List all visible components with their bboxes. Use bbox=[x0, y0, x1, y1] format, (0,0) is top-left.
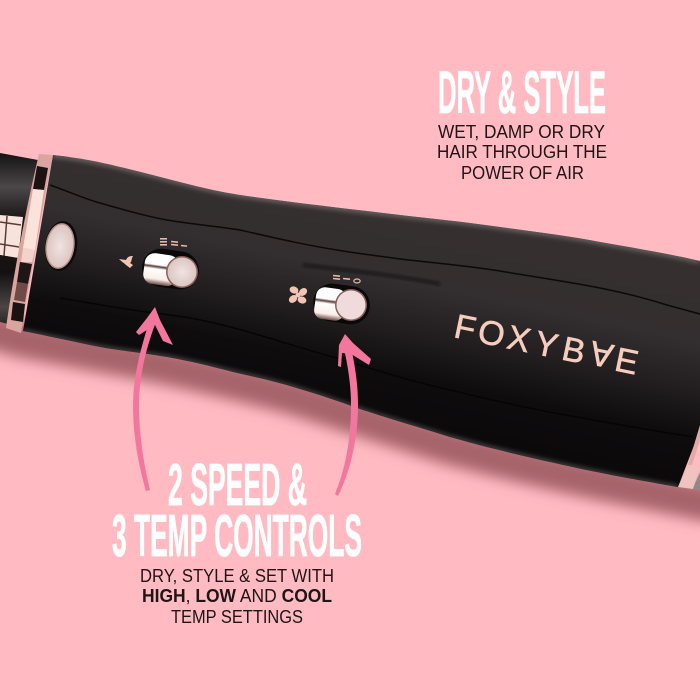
body rim light bbox=[23, 155, 700, 487]
infographic canvas bbox=[0, 70, 700, 623]
infographic canvas: 3 TEMP CONTROLS bbox=[112, 503, 362, 569]
round button bbox=[42, 219, 80, 273]
text: controls description: TEMP SETTINGS bbox=[171, 607, 303, 627]
temperature level marks bbox=[160, 238, 187, 247]
logo: FOXYBAE: E bbox=[612, 341, 642, 383]
right collar bbox=[688, 425, 700, 465]
logo: FOXYBAE: A bbox=[586, 333, 617, 375]
text: dry and style description: HAIR THROUGH THE bbox=[437, 142, 607, 162]
speed level marks bbox=[333, 275, 360, 283]
logo: FOXYBAE: FOXYB bbox=[451, 308, 589, 372]
logo: FOXYBAE bbox=[451, 305, 642, 383]
body seams bbox=[50, 185, 700, 314]
heading: speed and temp controls bbox=[112, 452, 362, 569]
text: dry and style description: POWER OF AIR bbox=[461, 163, 584, 183]
icon: heat bbox=[119, 256, 133, 268]
text: dry and style description: WET, DAMP OR DRY bbox=[438, 122, 605, 142]
handle body bbox=[23, 155, 700, 487]
arrow: right control bbox=[335, 334, 371, 496]
text: dry and style description bbox=[437, 122, 607, 183]
chrome insert bbox=[0, 215, 23, 258]
left barrel bbox=[0, 153, 38, 324]
text: controls description: DRY, STYLE & SET WITH bbox=[140, 566, 334, 586]
speed slider bbox=[311, 281, 372, 327]
shadow under styler bbox=[0, 328, 700, 506]
icon: fan bbox=[287, 285, 309, 305]
text: controls description bbox=[140, 566, 334, 627]
text: controls description: HIGH, LOW AND COOL bbox=[142, 586, 332, 606]
rose gold collar bbox=[6, 154, 53, 333]
arrow: left control bbox=[133, 307, 173, 491]
temperature slider bbox=[140, 246, 201, 292]
heading: speed and temp controls: 2 SPEED & bbox=[168, 452, 307, 518]
hair styler bbox=[0, 153, 700, 490]
